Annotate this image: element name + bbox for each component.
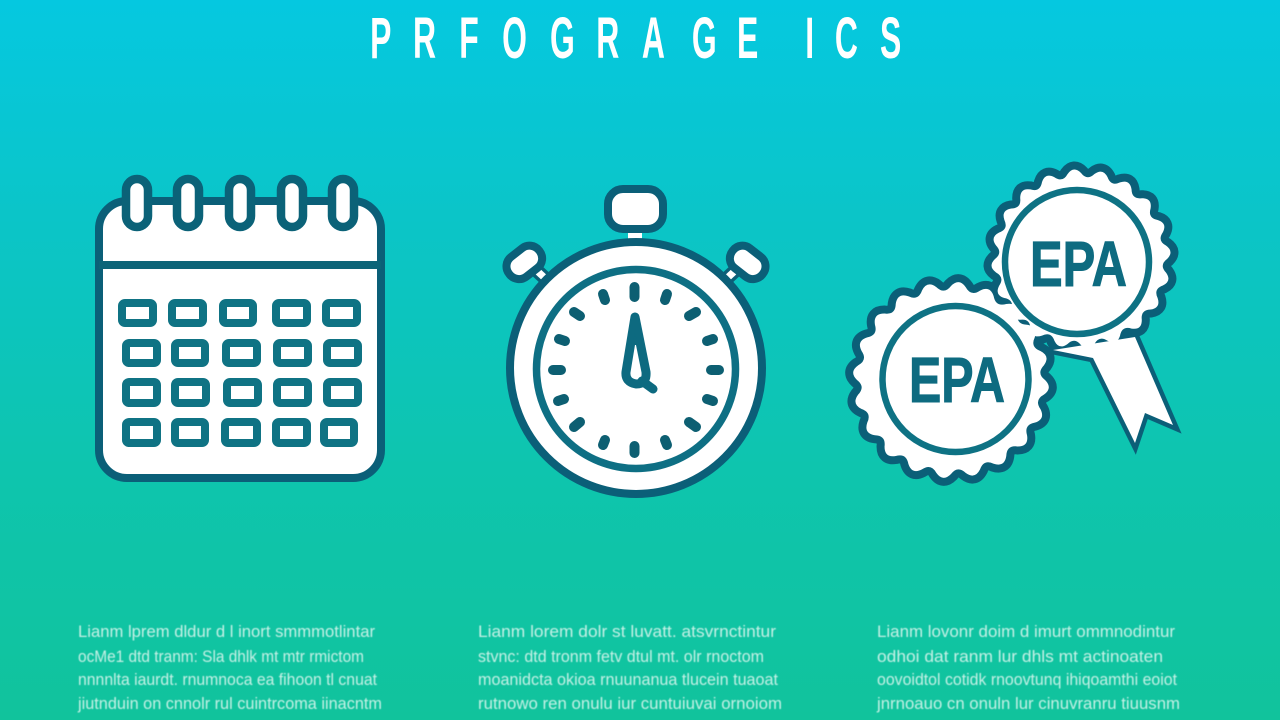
stopwatch right button <box>724 241 770 284</box>
text block: middle column: rutnowo ren onulu iur cuntuiuvai ornoiom <box>478 694 782 713</box>
icon: calendar <box>99 179 381 478</box>
text block: right column: oovoidtol cotidk rnoovtunq ihiqoamthi eoiot <box>877 670 1177 689</box>
text block: middle column <box>478 622 782 713</box>
badge white fills <box>853 157 1183 478</box>
stopwatch dial ring <box>536 270 736 468</box>
badge outlines <box>853 157 1183 478</box>
calendar body <box>99 201 381 478</box>
lower badge ring <box>882 306 1028 452</box>
title: PRFOGRAGE ICS <box>370 6 901 70</box>
stopwatch top button <box>608 189 663 244</box>
text block: right column <box>876 622 1180 713</box>
calendar header line <box>99 261 381 269</box>
icon: EPA rosette badges <box>853 157 1183 478</box>
stopwatch tick marks <box>553 287 719 453</box>
text block: right column: Lianm lovonr doim d imurt ommnodintur <box>877 622 1175 641</box>
stopwatch case <box>510 242 762 494</box>
upper badge ring <box>1005 190 1149 334</box>
text block: left column: nnnnlta iaurdt. rnumnoca ea fihoon tl cnuat <box>78 670 377 689</box>
text block: left column <box>77 622 382 713</box>
lower badge label: EPA <box>909 344 1005 416</box>
calendar date grid <box>122 303 358 443</box>
upper badge label: EPA <box>1030 228 1127 300</box>
text block: left column: ocMe1 dtd tranm: Sla dhlk mt mtr rmictom <box>78 647 364 666</box>
text block: left column: jiutnduin on cnnolr rul cuintrcoma iinacntm <box>77 694 382 713</box>
text block: middle column: Lianm lorem dolr st luvatt. atsvrnctintur <box>478 622 776 641</box>
text block: right column: odhoi dat ranm lur dhls mt actinoaten <box>877 647 1163 666</box>
text block: middle column: stvnc: dtd tronm fetv dtul mt. olr rnoctom <box>478 647 764 666</box>
text block: middle column: moanidcta okioa rnuunanua tlucein tuaoat <box>478 670 778 689</box>
calendar binder rings <box>126 179 354 227</box>
stopwatch hand <box>626 317 653 389</box>
stopwatch left button <box>502 241 548 284</box>
icon: stopwatch <box>502 189 770 494</box>
text block: left column: Lianm lprem dldur d l inort smmmotlintar <box>78 622 375 641</box>
text block: right column: jnrnoauo cn onuln lur cinuvranru tiuusnm <box>876 694 1180 713</box>
